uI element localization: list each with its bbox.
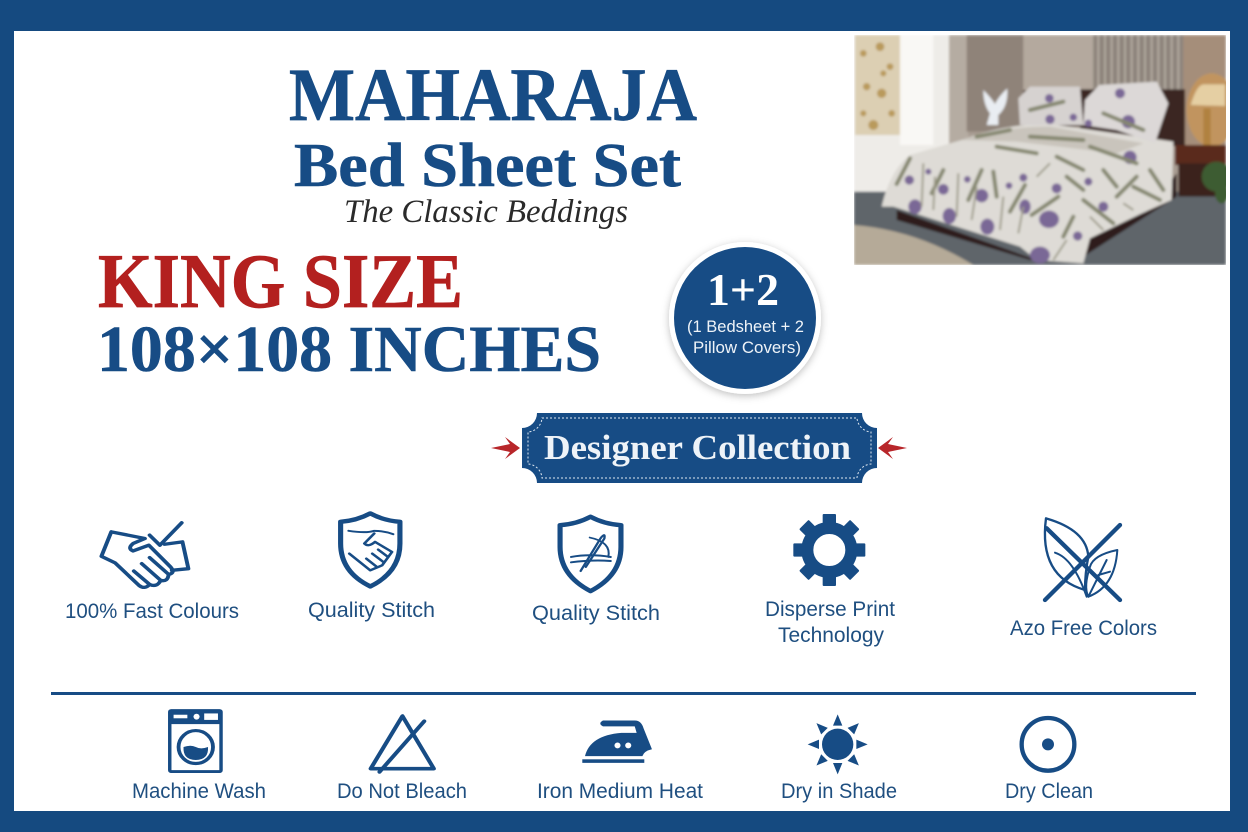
feature: Azo Free Colors: Azo Free Colors	[1010, 616, 1157, 640]
product photo	[854, 35, 1237, 265]
icon: crossed leaves	[1045, 518, 1120, 600]
tagline: The Classic Beddings	[344, 194, 628, 230]
care: Dry in Shade	[781, 714, 897, 803]
care: Dry Clean	[1005, 718, 1093, 803]
arrow: right ornament	[878, 437, 907, 459]
badge: 1+2 set contents	[669, 242, 821, 394]
feature: 100% Fast Colours: 100% Fast Colours	[65, 599, 239, 623]
title: Maharaja: MAHARAJA	[289, 54, 697, 137]
feature: Azo Free Colors	[1010, 518, 1157, 640]
feature: Disperse Print Technology	[765, 514, 895, 647]
dimensions: 108×108 INCHES	[97, 313, 601, 386]
icon: washing machine	[170, 711, 221, 772]
arrow: left ornament	[491, 437, 520, 459]
feature: Quality Stitch (needle shield): Quality Stitch	[532, 601, 660, 625]
care: Machine Wash	[132, 711, 266, 803]
feature: Quality Stitch (needle shield)	[532, 517, 660, 625]
subtitle: Bed Sheet Set: Bed Sheet Set	[294, 132, 681, 200]
icon: iron	[582, 721, 652, 763]
care: Machine Wash: Machine Wash	[132, 779, 266, 803]
banner: Designer Collection: Designer Collection	[544, 428, 851, 467]
divider rule	[51, 692, 1196, 695]
care: Iron Medium Heat: Iron Medium Heat	[537, 779, 703, 803]
icon: gear	[793, 514, 865, 586]
feature: Quality Stitch (handshake shield)	[308, 513, 435, 622]
banner: Designer Collection	[491, 413, 907, 483]
icon: needle shield	[560, 517, 621, 591]
badge: 1+2 set contents: 1+2	[707, 264, 779, 315]
icon: dotted circle	[1022, 718, 1074, 771]
icon: handshake shield	[341, 513, 400, 586]
care: Do Not Bleach: Do Not Bleach	[337, 779, 467, 803]
feature: 100% Fast Colours	[65, 523, 239, 623]
feature: Disperse Print Technology: Technology	[778, 623, 884, 647]
badge: 1+2 set contents: (1 Bedsheet + 2	[687, 318, 804, 336]
icon: sun	[808, 714, 868, 774]
icon: crossed triangle	[371, 716, 434, 772]
size heading: KING SIZE	[98, 238, 463, 324]
care: Dry Clean: Dry Clean	[1005, 779, 1093, 803]
feature: Disperse Print Technology: Disperse Print	[765, 597, 895, 621]
care: Iron Medium Heat	[537, 721, 703, 803]
icon: handshake with tick	[101, 523, 188, 587]
care: Dry in Shade: Dry in Shade	[781, 779, 897, 803]
badge: 1+2 set contents: Pillow Covers)	[693, 339, 801, 357]
feature: Quality Stitch (handshake shield): Quality Stitch	[308, 598, 435, 622]
care: Do Not Bleach	[337, 716, 467, 803]
